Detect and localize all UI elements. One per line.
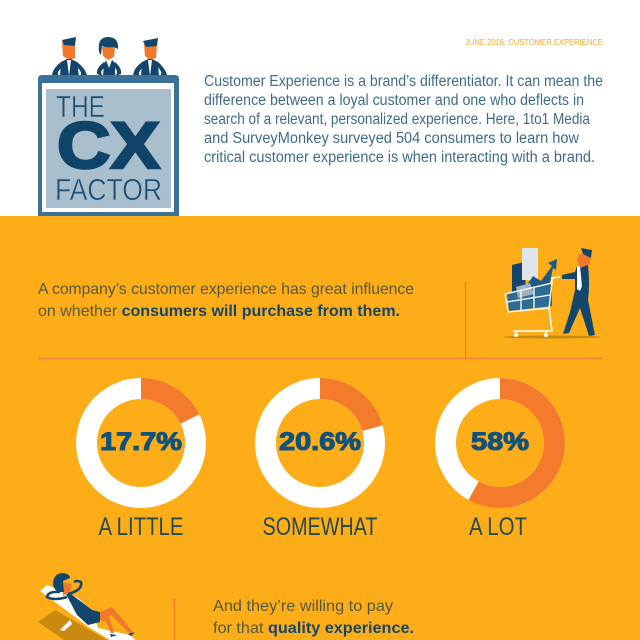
intro text block: search of a relevant, personalized experience. Here, 1to1 Media (204, 111, 590, 128)
value: 58% (471, 428, 529, 456)
title sign: The CX Factor (38, 37, 179, 216)
label: SOMEWHAT (262, 513, 378, 541)
intro text block: Customer Experience is a brand’s differentiator. It can mean the (204, 73, 603, 90)
intro text block (204, 73, 603, 166)
FACTOR: FACTOR (55, 172, 162, 207)
pay statement: for that quality experience. (213, 620, 414, 637)
icon: three business people (52, 37, 167, 76)
influence statement: on whether consumers will purchase from them. (38, 303, 400, 320)
intro text block: and SurveyMonkey surveyed 504 consumers to learn how (204, 130, 580, 147)
influence statement (38, 281, 414, 320)
label: A LOT (469, 513, 527, 541)
value: 20.6% (279, 428, 361, 456)
THE: THE (56, 89, 105, 124)
donut chart: a lot (446, 388, 554, 541)
value: 17.7% (100, 428, 182, 456)
donut chart: somewhat (262, 388, 378, 541)
intro text block: difference between a loyal customer and one who deflects in (204, 92, 584, 109)
sign frame (38, 75, 179, 216)
pay statement: And they’re willing to pay (213, 598, 393, 615)
divider line (174, 598, 176, 640)
icon: woman on lounge chair (38, 573, 136, 640)
orange background panel (0, 216, 640, 640)
divider lines (38, 282, 603, 358)
pay statement (213, 598, 414, 637)
intro text block: critical customer experience is when interacting with a brand. (204, 149, 595, 166)
influence statement: A company’s customer experience has great influence (38, 281, 414, 298)
icon: shopper with cart (503, 248, 601, 338)
CX: CX (57, 108, 160, 182)
label: A LITTLE (98, 513, 184, 541)
donut chart: a little (86, 388, 196, 541)
date line: JUNE 2016: CUSTOMER EXPERIENCE (465, 37, 603, 47)
